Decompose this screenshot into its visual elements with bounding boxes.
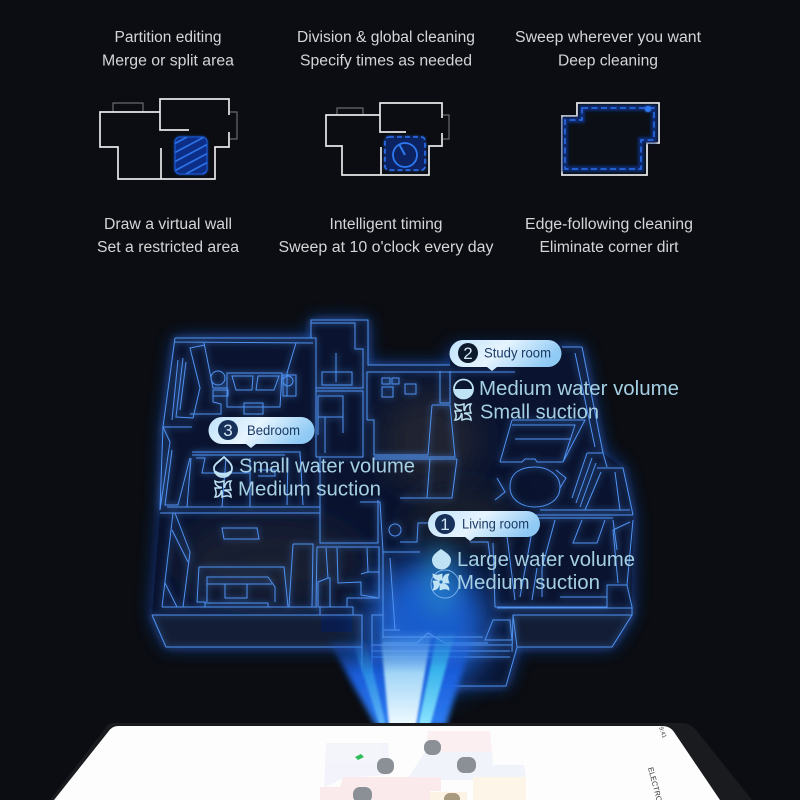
small suction text: Small suction	[480, 400, 599, 424]
light beam from phone	[328, 630, 472, 726]
caption: sweep wherever you want: Deep cleaning	[558, 52, 658, 70]
study room pill: 2	[463, 344, 473, 363]
phone	[50, 723, 752, 800]
caption: draw a virtual wall	[97, 216, 239, 256]
app map	[320, 731, 526, 800]
caption: partition editing: Partition editing	[114, 29, 222, 46]
phone body	[50, 723, 752, 800]
living room pill: Living room	[462, 516, 529, 532]
bedroom upper	[172, 343, 296, 420]
caption: intelligent timing: Sweep at 10 o'clock every day	[278, 239, 494, 256]
outer walls	[160, 320, 450, 510]
icon: floor plan with timer	[326, 103, 449, 175]
caption: edge-following cleaning: Eliminate corner dirt	[540, 239, 679, 256]
label: living room	[428, 511, 635, 598]
caption: sweep wherever you want: Sweep wherever you want	[515, 29, 702, 46]
caption: partition editing	[102, 29, 234, 70]
label: bedroom	[208, 417, 415, 500]
bedroom pill: Bedroom	[247, 423, 300, 438]
label: study room	[450, 340, 679, 424]
living room	[383, 552, 488, 643]
living room pill	[428, 511, 540, 541]
caption: intelligent timing	[278, 216, 494, 256]
suction ring	[431, 570, 459, 598]
caption: division and global cleaning: Division & global cleaning	[297, 29, 475, 46]
icon: floor plan with virtual wall and restricted area	[100, 99, 237, 179]
icon: medium water	[454, 380, 473, 398]
bedroom lower	[162, 513, 317, 607]
caption: intelligent timing: Intelligent timing	[330, 216, 442, 233]
caption: division and global cleaning	[297, 29, 475, 70]
bedroom pill: 3	[223, 421, 233, 440]
living room pill: 1	[440, 515, 450, 534]
icon: small water	[214, 457, 232, 477]
study room pill: Study room	[484, 346, 551, 360]
caption: division and global cleaning: Specify times as needed	[300, 52, 472, 70]
sofa and table	[500, 347, 603, 462]
icon: fan	[215, 481, 231, 497]
medium suction text: Medium suction	[457, 571, 600, 594]
caption: edge-following cleaning: Edge-following cleaning	[525, 216, 693, 233]
phone screen	[54, 726, 720, 800]
caption: partition editing: Merge or split area	[102, 52, 234, 70]
icon: edge-following floor plan	[562, 103, 659, 175]
caption: draw a virtual wall: Draw a virtual wall	[104, 216, 232, 233]
icon: fan	[433, 574, 449, 590]
medium suction text: Medium suction	[238, 478, 381, 500]
right rooms	[505, 515, 633, 600]
icon: fan	[455, 404, 471, 420]
app room markers	[353, 740, 476, 800]
icon: large water	[432, 549, 451, 570]
large water text: Large water volume	[457, 548, 635, 571]
small water text: Small water volume	[239, 454, 415, 478]
phone status text: 9:41	[657, 726, 667, 740]
bedroom pill	[208, 417, 314, 448]
caption: sweep wherever you want	[515, 29, 702, 70]
study room pill	[450, 340, 562, 371]
caption: draw a virtual wall: Set a restricted area	[97, 239, 239, 256]
medium water text: Medium water volume	[479, 377, 679, 400]
floor plan hologram	[152, 320, 633, 690]
caption: edge-following cleaning	[525, 216, 693, 256]
